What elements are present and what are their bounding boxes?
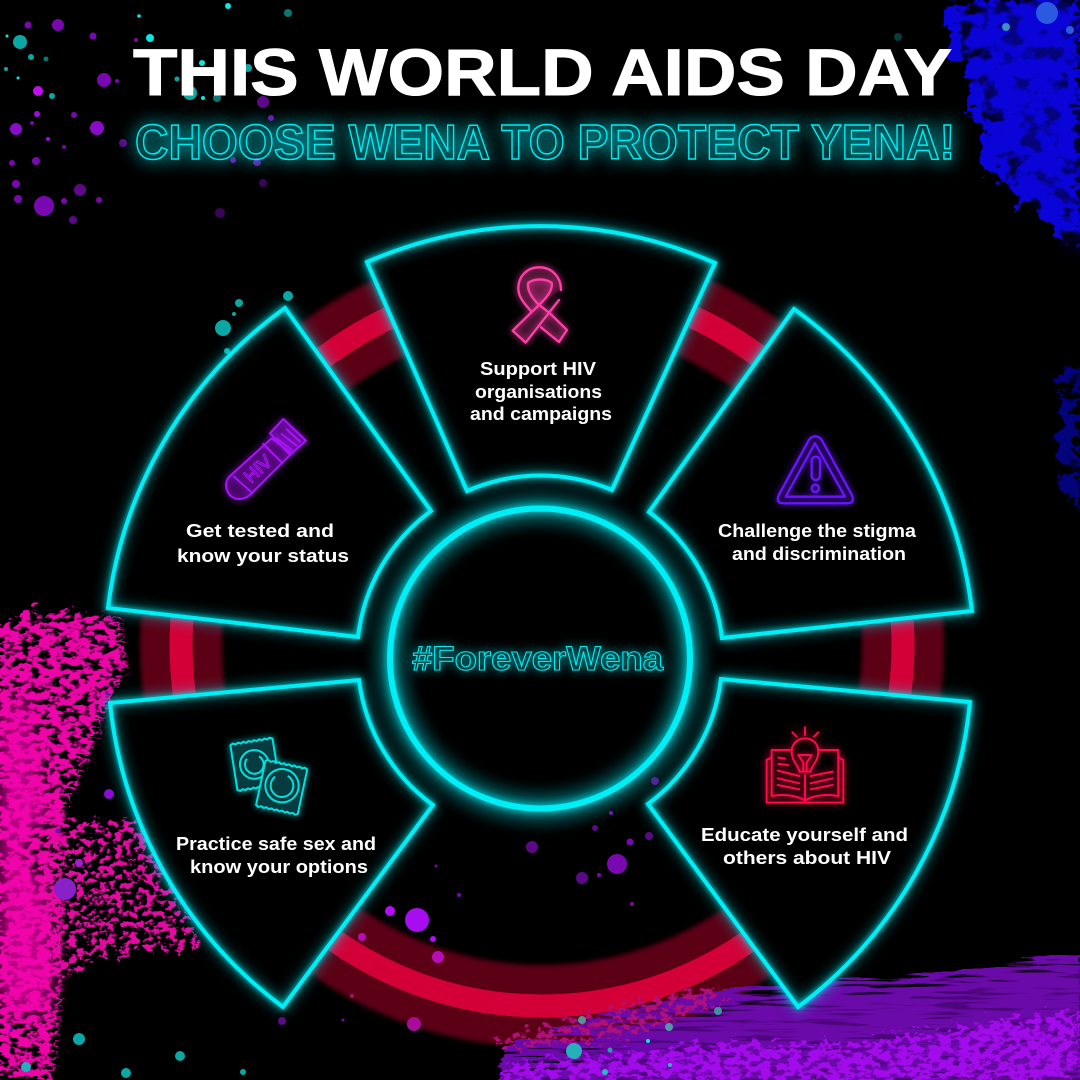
- panel outline: [648, 679, 970, 1007]
- panel: educate: [648, 679, 970, 1007]
- hashtag glow: #ForeverWena: [412, 640, 664, 678]
- panel outline: [108, 308, 431, 637]
- text: practice: know your options: [190, 857, 368, 877]
- splatter: blue highlights: [1036, 2, 1074, 34]
- text: challenge: Challenge the stigma: [718, 521, 917, 541]
- subtitle: [135, 116, 955, 170]
- text: support: [470, 359, 612, 424]
- text: challenge: [718, 521, 917, 564]
- text: get tested: know your status: [177, 546, 349, 566]
- paint texture: purple brush bottom right: [495, 952, 1080, 1080]
- icon: warning triangle: [778, 436, 853, 503]
- icon: test tube: HIV: [239, 450, 277, 487]
- panel outline: [367, 226, 715, 491]
- text: practice: [176, 834, 376, 877]
- panel outline: [110, 680, 433, 1007]
- circle ring: [390, 508, 690, 808]
- center circle: [390, 508, 690, 808]
- text: get tested: Get tested and: [186, 521, 334, 541]
- subtitle glow: CHOOSE WENA TO PROTECT YENA!: [135, 116, 955, 170]
- text: practice: Practice safe sex and: [176, 834, 376, 854]
- paint texture: pink brush left: [0, 612, 205, 1080]
- paint texture: blue top right: [945, 0, 1080, 510]
- red ring: [181, 284, 903, 1006]
- text: educate: others about HIV: [723, 848, 891, 868]
- panel: challenge stigma: [649, 309, 972, 638]
- title: THIS WORLD AIDS DAY: [133, 35, 952, 109]
- text: educate: Educate yourself and: [701, 825, 908, 845]
- icon: test tube: [226, 419, 306, 499]
- icon: condoms: [230, 737, 308, 815]
- hashtag: #ForeverWena: [412, 640, 664, 678]
- splatter: purple dots: [9, 19, 659, 1032]
- panel outline: [649, 309, 972, 638]
- subtitle outline text: CHOOSE WENA TO PROTECT YENA!: [135, 116, 955, 170]
- text: support: organisations: [475, 382, 602, 402]
- panel: support HIV organisations: [367, 226, 715, 491]
- panel: practice safe sex: [110, 680, 433, 1007]
- icon: ribbon: [513, 267, 567, 343]
- text: get tested: [177, 521, 349, 566]
- panel: get tested: [108, 308, 431, 637]
- text: support: Support HIV: [480, 359, 596, 379]
- text: challenge: and discrimination: [732, 544, 906, 564]
- icon: book and bulb: [767, 727, 843, 803]
- text: support: and campaigns: [470, 404, 612, 424]
- text: educate: [701, 825, 908, 868]
